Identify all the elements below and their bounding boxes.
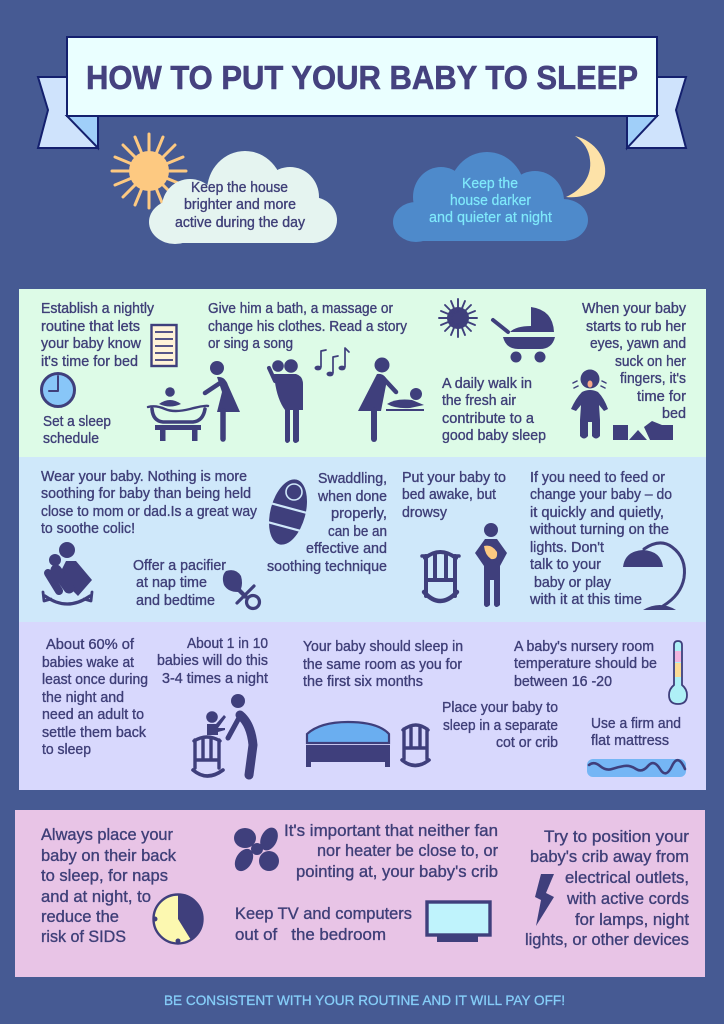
back sleeping text: reduce the: [41, 908, 119, 926]
back sleeping text: risk of SIDS: [41, 928, 126, 946]
title: HOW TO PUT YOUR BABY TO SLEEP: [86, 59, 638, 96]
tired signs text: bed: [662, 406, 686, 422]
panel: soothing: [19, 457, 706, 622]
separate crib text: Place your baby to: [442, 700, 558, 716]
day cloud text: brighter and more: [184, 197, 296, 213]
fan and heater text: [284, 822, 498, 881]
routine text: Establish a nightly: [41, 301, 155, 317]
icon: bathing baby: [148, 387, 208, 441]
night feeding text: without turning on the: [529, 522, 669, 538]
icon: moon: [566, 136, 605, 197]
night feeding text: change your baby – do: [530, 487, 672, 503]
awake text: bed awake, but: [402, 487, 496, 503]
icon: small sun: [439, 299, 477, 337]
fan and heater text: nor heater be close to, or: [317, 842, 498, 860]
icon: parent holding baby upright: [475, 523, 507, 607]
nursery temperature text: A baby's nursery room: [514, 639, 654, 655]
waking statistic text: to sleep: [42, 742, 91, 758]
wear your baby text: Wear your baby. Nothing is more: [41, 469, 247, 485]
night cloud: [393, 152, 588, 242]
icon: tv: [427, 902, 490, 942]
walk text: the fresh air: [442, 393, 516, 409]
awake text: Put your baby to: [402, 470, 506, 486]
icon: father carrying child: [269, 359, 303, 443]
night cloud text: [429, 176, 552, 226]
night feeding text: [529, 470, 672, 608]
night cloud text: Keep the: [462, 176, 518, 192]
separate crib text: [442, 700, 558, 751]
separate crib text: cot or crib: [496, 735, 558, 751]
tired signs text: time for: [637, 389, 686, 405]
night feeding text: talk to your: [530, 557, 601, 573]
fan and heater text: pointing at, your baby's crib: [296, 863, 498, 881]
waking statistic text: About 60% of: [46, 637, 135, 653]
electrical outlets text: for lamps, night: [575, 911, 689, 929]
waking statistic text: the night and: [42, 690, 124, 706]
icon: mattress: [587, 759, 686, 777]
swaddling text: effective and: [306, 541, 387, 557]
icon: sun: [112, 134, 186, 208]
routine text: [41, 301, 155, 370]
nursery temperature text: temperature should be: [514, 656, 657, 672]
swaddling text: Swaddling,: [318, 471, 387, 487]
wear your baby text: close to mom or dad.Is a great way: [41, 504, 258, 520]
night cloud text: and quieter at night: [429, 210, 552, 226]
icon: music notes: [314, 348, 349, 376]
same room text: Your baby should sleep in: [303, 639, 463, 655]
icon: swaddled baby: [262, 475, 314, 549]
icon: crib: [422, 552, 459, 601]
bath text: change his clothes. Read a story: [208, 319, 408, 335]
mattress text: Use a firm and: [591, 716, 681, 732]
night cloud text: house darker: [450, 193, 531, 209]
swaddling text: soothing technique: [267, 559, 387, 575]
electrical outlets text: electrical outlets,: [565, 869, 689, 887]
pacifier text: at nap time: [136, 575, 207, 591]
one in ten text: About 1 in 10: [187, 636, 268, 652]
icon: lamp: [623, 543, 684, 610]
icon: crib small: [402, 725, 429, 766]
bath text: Give him a bath, a massage or: [208, 301, 393, 317]
swaddling text: [267, 471, 387, 575]
tired signs text: suck on her: [615, 354, 686, 370]
wear your baby text: to soothe colic!: [41, 521, 135, 537]
icon: mother at bath: [205, 361, 240, 439]
back sleeping text: baby on their back: [41, 847, 177, 865]
pacifier text: [133, 558, 226, 609]
tv text: Keep TV and computers: [235, 905, 412, 923]
waking statistic text: settle them back: [42, 725, 147, 741]
icon: crying baby and blocks: [571, 370, 673, 440]
sleep schedule text: [43, 414, 111, 447]
sleep schedule text: Set a sleep: [43, 414, 111, 430]
awake text: [402, 470, 506, 521]
sleep schedule text: schedule: [43, 431, 99, 447]
tired signs text: starts to rub her: [586, 319, 686, 335]
icon: clock: [42, 374, 74, 406]
same room text: [303, 639, 463, 690]
icon: lightning bolt: [535, 874, 554, 926]
back sleeping text: to sleep, for naps: [41, 867, 168, 885]
back sleeping text: [41, 826, 177, 946]
tv text: out of the bedroom: [235, 926, 386, 944]
day cloud text: active during the day: [175, 215, 306, 231]
footer message: BE CONSISTENT WITH YOUR ROUTINE AND IT WILL PAY OFF!: [164, 993, 565, 1008]
electrical outlets text: Try to position your: [544, 828, 690, 846]
tired signs text: [582, 301, 687, 422]
icon: parent holding baby: [43, 542, 92, 604]
walk text: A daily walk in: [442, 376, 532, 392]
pacifier text: and bedtime: [136, 593, 215, 609]
icon: mother changing baby: [358, 358, 424, 439]
icon: stroller: [493, 307, 555, 362]
one in ten text: [157, 636, 268, 687]
night feeding text: If you need to feed or: [530, 470, 665, 486]
separate crib text: sleep in a separate: [443, 718, 558, 734]
icon: schedule sheet: [152, 325, 176, 366]
night feeding text: with it at this time: [529, 592, 642, 608]
panel: safety: [15, 810, 705, 977]
tired signs text: When your baby: [582, 301, 687, 317]
walk text: contribute to a: [442, 411, 534, 427]
mattress text: flat mattress: [591, 733, 669, 749]
icon: fan: [231, 825, 281, 874]
back sleeping text: and at night, to: [41, 888, 151, 906]
night feeding text: baby or play: [534, 575, 612, 591]
tv text: [235, 905, 412, 944]
waking statistic text: need an adult to: [42, 707, 144, 723]
one in ten text: 3-4 times a night: [162, 671, 268, 687]
waking statistic text: least once during: [42, 672, 148, 688]
electrical outlets text: baby's crib away from: [530, 848, 689, 866]
swaddling text: properly,: [331, 506, 387, 522]
panel: night waking and room: [19, 622, 706, 790]
back sleeping text: Always place your: [41, 826, 173, 844]
nursery temperature text: [514, 639, 657, 690]
electrical outlets text: [525, 828, 690, 949]
swaddling text: when done: [317, 489, 387, 505]
nursery temperature text: between 16 -20: [514, 674, 612, 690]
night feeding text: it quickly and quietly,: [530, 505, 664, 521]
same room text: the first six months: [303, 674, 423, 690]
bath text: or sing a song: [208, 336, 293, 352]
walk text: good baby sleep: [442, 428, 546, 444]
routine text: routine that lets: [41, 319, 140, 335]
day cloud: [149, 151, 337, 244]
swaddling text: can be an: [328, 524, 387, 540]
awake text: drowsy: [402, 505, 448, 521]
mattress text: [591, 716, 681, 749]
routine text: your baby know: [41, 336, 142, 352]
panel: daily routine: [19, 289, 706, 457]
electrical outlets text: with active cords: [566, 890, 689, 908]
same room text: the same room as you for: [303, 657, 462, 673]
wear your baby text: [41, 469, 258, 537]
one in ten text: babies will do this: [157, 653, 268, 669]
icon: pacifier: [223, 570, 260, 608]
tired signs text: fingers, it's: [620, 371, 686, 387]
waking statistic text: [42, 637, 148, 758]
day cloud text: [175, 180, 306, 231]
pacifier text: Offer a pacifier: [133, 558, 226, 574]
tired signs text: eyes, yawn and: [590, 336, 686, 352]
electrical outlets text: lights, or other devices: [525, 931, 689, 949]
icon: clock half: [152, 894, 203, 944]
night feeding text: lights. Don't: [530, 540, 604, 556]
fan and heater text: It's important that neither fan: [284, 822, 498, 840]
bath text: [208, 301, 408, 352]
walk text: [442, 376, 546, 444]
icon: thermometer: [669, 641, 687, 704]
routine text: it's time for bed: [41, 354, 138, 370]
icon: parent settling baby in crib: [193, 694, 253, 776]
wear your baby text: soothing for baby than being held: [41, 486, 251, 502]
title banner: [38, 37, 686, 148]
icon: bed: [306, 722, 390, 767]
day cloud text: Keep the house: [191, 180, 288, 196]
waking statistic text: babies wake at: [42, 655, 134, 671]
